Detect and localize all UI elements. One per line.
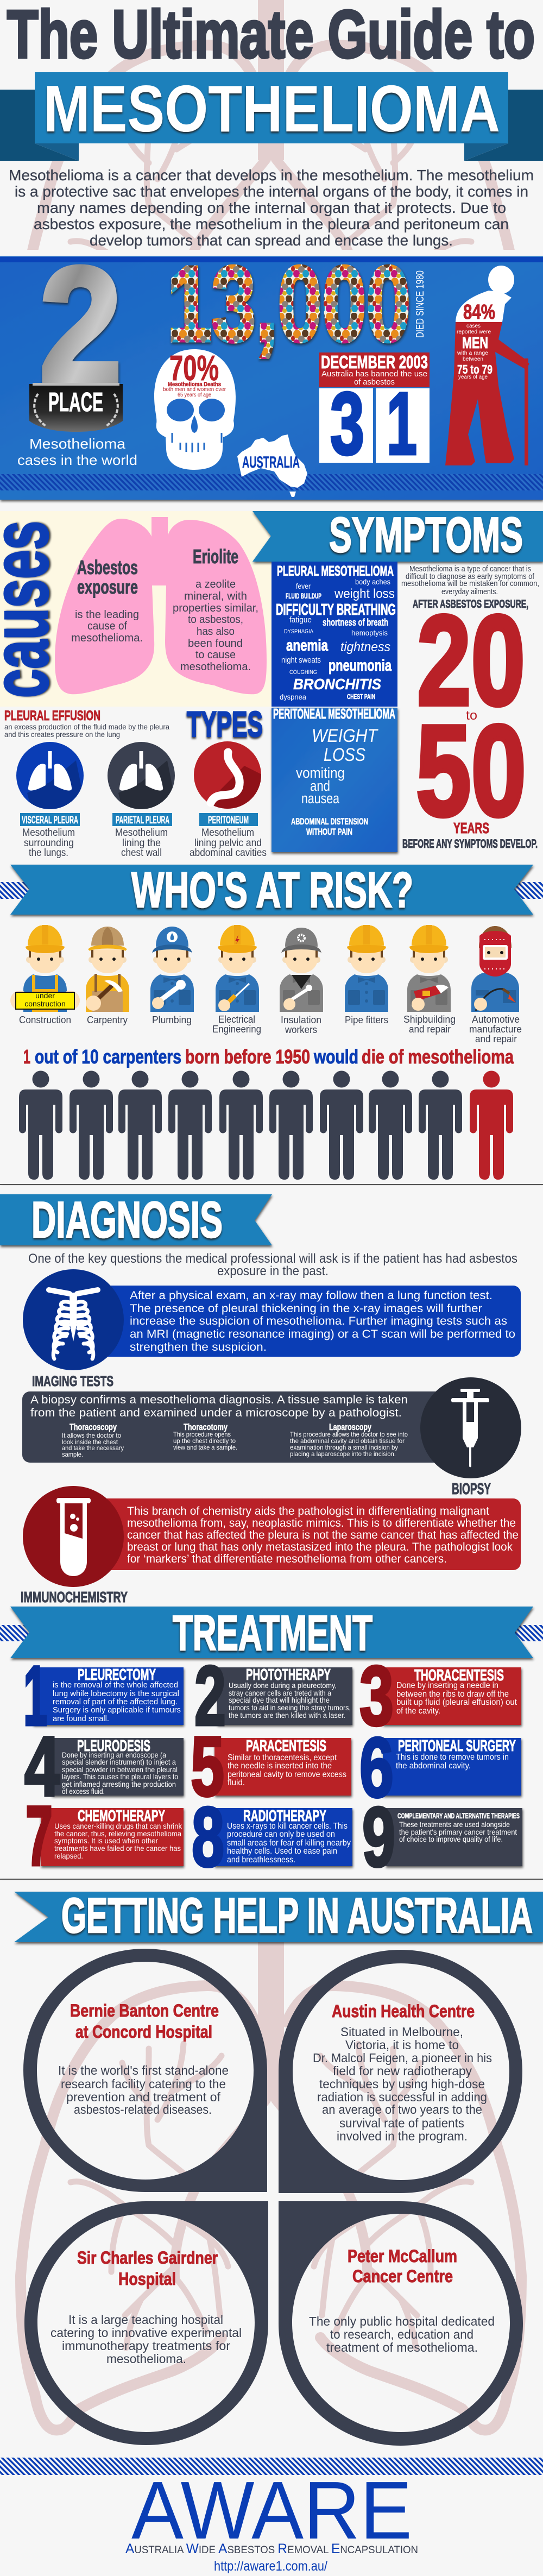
centre: Bernie Banton: at Concord Hospital <box>75 2022 212 2042</box>
heading: treatment ribbon <box>0 1606 543 1661</box>
worker: pipe fitters <box>345 925 388 1012</box>
panel: pleural mesothelioma symptoms: night sweats <box>281 656 321 665</box>
calendar: December 2003 <box>319 352 430 473</box>
type: peritoneum: lining pelvic and <box>194 837 262 849</box>
calendar: December 2003: DECEMBER 2003 <box>321 352 428 372</box>
treatment 8: radiotherapy: healthy cells. Used to ease pain <box>227 1847 337 1856</box>
treatment 7: chemotherapy <box>26 1789 184 1884</box>
worker: carpentry <box>86 927 129 1012</box>
type: parietal pleura: chest wall <box>121 847 162 859</box>
icon: test tube <box>56 1498 91 1576</box>
panel: imaging tests: an MRI (magnetic resonance imaging) or a CT scan will be performed to <box>130 1328 515 1340</box>
centre: Sir Charles Gairdner: Hospital <box>118 2269 176 2289</box>
intro text: develop tumors that can spread and encase the lungs. <box>90 232 453 249</box>
headline: 1 out of 10 carpenters: out of 10 carpenters <box>35 1045 181 1068</box>
panel: pleural mesothelioma symptoms: dyspnea <box>280 692 306 701</box>
centre: Bernie Banton: Bernie Banton Centre <box>70 2001 219 2020</box>
centre: Austin Health: field for new radiotherapy <box>333 2064 472 2078</box>
logo: AWARE: http://aware1.com.au/ <box>214 2559 327 2574</box>
text: laparoscopy: examination through a small incision by <box>290 1444 398 1451</box>
worker labels: Plumbing <box>152 1015 192 1025</box>
treatment 9: complementary therapies: These treatments are used alongside <box>399 1820 510 1829</box>
text: eriolite: to cause <box>195 649 236 661</box>
panel: immunochemistry <box>21 1486 521 1605</box>
worker labels: Automotive <box>472 1014 520 1025</box>
treatment 8: radiotherapy: RADIOTHERAPY <box>243 1807 326 1825</box>
treatment 2: phototherapy: stray cancer cells are treted with a <box>229 1689 331 1697</box>
text: laparoscopy: placing a laparoscope into the incision. <box>290 1450 396 1458</box>
illustration: lungs <box>55 517 267 694</box>
text: diagnosis intro <box>28 1251 517 1278</box>
type: parietal pleura: PARIETAL PLEURA <box>116 815 169 826</box>
panel: biopsy <box>22 1377 521 1498</box>
treatment 6: peritoneal surgery: 6 <box>359 1721 394 1815</box>
panel: immunochemistry: mesothelioma from, say, neoplastic mimics. This is to differentiate whether the <box>127 1517 516 1529</box>
panel: peritoneal mesothelioma symptoms: WITHOUT PAIN <box>306 827 352 837</box>
treatment 8: radiotherapy: small areas for fear of killing nearby <box>227 1838 351 1848</box>
text: latency 20 to 50 years <box>401 564 539 851</box>
centre: Bernie Banton <box>23 1949 267 2192</box>
text: asbestos exposure: exposure <box>77 576 138 598</box>
treatment 3: thoracentesis: built up fluid (pleural effusion) out <box>396 1698 517 1707</box>
text: pleural effusion: an excess production of the fluid made by the pleura <box>4 722 169 731</box>
panel: immunochemistry: cancer that has affected the pleura is not the same cancer that has affected the <box>127 1529 519 1541</box>
worker: electrical engineering <box>216 925 259 1012</box>
panel: biopsy: BIOPSY <box>452 1481 491 1498</box>
panel: immunochemistry: for ‘markers’ that differentiate mesothelioma from other cancers. <box>127 1553 447 1565</box>
worker labels <box>19 1014 522 1044</box>
treatment 9: complementary therapies <box>362 1790 522 1885</box>
treatment 3: thoracentesis: 3 <box>359 1649 394 1743</box>
text: thoracotomy: Thoracotomy <box>184 1422 228 1432</box>
centre: Sir Charles Gairdner: mesothelioma. <box>106 2352 186 2366</box>
headline: 1 out of 10 carpenters <box>23 1045 514 1068</box>
heading: diagnosis ribbon: DIAGNOSIS <box>31 1191 223 1248</box>
centre: Austin Health: involved in the program. <box>337 2129 468 2143</box>
worker labels: Carpentry <box>87 1015 128 1025</box>
treatment 6: peritoneal surgery <box>359 1721 521 1815</box>
figure: elderly man 84%: with a range <box>457 350 488 356</box>
treatment 4: pleurodesis: special powder in between the pleural <box>62 1765 178 1774</box>
panel: causes <box>0 511 272 707</box>
panel: imaging tests: The presence of pleural thickening in the x-ray images will further <box>130 1302 482 1315</box>
treatment 2: phototherapy: special dye that will highlight the <box>229 1696 330 1704</box>
treatment 5: paracentesis: fluid. <box>228 1778 245 1787</box>
treatment 3: thoracentesis <box>359 1649 521 1743</box>
panel: imaging tests: After a physical exam, an x-ray may follow then a lung function test. <box>130 1289 493 1302</box>
panel: pleural mesothelioma symptoms: hemoptysis <box>351 628 388 637</box>
treatment 1: pleurectomy: PLEURECTOMY <box>78 1666 156 1684</box>
panel: pleural mesothelioma symptoms: anemia <box>286 637 328 654</box>
centre: Peter McCallum: Cancer Centre <box>352 2266 453 2286</box>
treatment 3: thoracentesis: of the cavity. <box>396 1706 440 1716</box>
stat: 2nd place <box>17 232 137 468</box>
treatment 9: complementary therapies: 9 <box>362 1790 395 1885</box>
panel: pleural mesothelioma symptoms: fatigue <box>289 615 312 625</box>
treatment 1: pleurectomy: are found small. <box>53 1714 109 1723</box>
type: visceral pleura: VISCERAL PLEURA <box>22 815 78 826</box>
map: Australia: AUSTRALIA <box>242 454 300 471</box>
text: thoracoscopy: Thoracoscopy <box>70 1422 117 1432</box>
intro text: Mesothelioma is a cancer that develops in the mesothelium. The mesothelium <box>9 167 534 184</box>
text: laparoscopy <box>290 1422 408 1458</box>
centre: Bernie Banton: asbestos-related diseases. <box>74 2102 212 2117</box>
panel: peritoneal mesothelioma symptoms: PERITONEAL MESOTHELIOMA <box>273 706 395 722</box>
logo: AWARE: AWARE <box>131 2464 412 2556</box>
worker: insulation <box>280 928 323 1012</box>
text: pleural effusion: and this creates pressure on the lung <box>4 730 120 739</box>
worker labels: Electrical <box>218 1014 255 1025</box>
treatment 5: paracentesis <box>191 1720 351 1814</box>
worker labels: workers <box>285 1024 317 1035</box>
panel: imaging tests: IMAGING TESTS <box>32 1373 113 1389</box>
logo: AWARE: AUSTRALIA WIDE ASBESTOS REMOVAL ENCAPSULATION <box>125 2541 418 2556</box>
treatment 4: pleurodesis: special slender instrument) to inject a <box>62 1758 176 1766</box>
map: Australia <box>237 434 307 497</box>
worker labels: and repair <box>475 1034 517 1044</box>
worker labels: Pipe fitters <box>345 1015 388 1025</box>
centre: Austin Health: Dr. Malcol Feigen, a pioneer in his <box>313 2051 492 2065</box>
figure: elderly man 84%: 75 to 79 <box>457 362 493 376</box>
intro text: is a protective sac that envelopes the internal organs of the body, it comes in <box>15 183 528 200</box>
treatment 5: paracentesis: 5 <box>191 1720 224 1814</box>
panel: pleural mesothelioma symptoms: FLUID BUILDUP <box>286 591 321 600</box>
worker: construction: under <box>35 991 55 1000</box>
text: pleural effusion <box>4 708 169 739</box>
stat: skull 70% <box>154 348 236 470</box>
centre: Sir Charles Gairdner: Sir Charles Gairdner <box>77 2248 218 2268</box>
text: diagnosis intro: exposure in the past. <box>217 1264 329 1278</box>
icon: ribcage <box>49 1290 98 1359</box>
centre: Bernie Banton: It is the world's first stand-alone <box>58 2063 229 2077</box>
type: peritoneum: Mesothelium <box>201 827 254 839</box>
panel: pleural mesothelioma symptoms <box>272 562 397 707</box>
worker labels: Construction <box>19 1015 71 1025</box>
treatment 5: paracentesis: the needle is inserted into the <box>228 1761 332 1771</box>
treatment 5: paracentesis: Similar to thoracentesis, except <box>228 1753 337 1762</box>
treatment 4: pleurodesis: 4 <box>24 1720 60 1814</box>
panel: biopsy: from the patient and examined under a microscope by a pathologist. <box>30 1407 402 1419</box>
treatment 9: complementary therapies: the patient's primary cancer treatment <box>399 1828 517 1836</box>
treatment 7: chemotherapy: treatments have failed or the cancer has <box>54 1844 181 1853</box>
calendar: December 2003: 3 <box>330 374 364 473</box>
panel: immunochemistry: This branch of chemistry aids the pathologist in differentiating malignant <box>127 1505 489 1517</box>
figure: elderly man 84% <box>445 266 529 465</box>
centre: Austin Health: Victoria, it is home to <box>345 2038 459 2052</box>
panel: peritoneal mesothelioma symptoms: vomiting <box>296 765 345 781</box>
text: thoracoscopy: It allows the doctor to <box>62 1432 121 1439</box>
type: peritoneum <box>190 741 267 859</box>
text: asbestos exposure: is the leading <box>75 609 139 621</box>
worker: construction: construction <box>24 999 66 1008</box>
panel: biopsy: A biopsy confirms a mesothelioma diagnosis. A tissue sample is taken <box>30 1394 408 1406</box>
worker labels: and repair <box>409 1024 451 1035</box>
treatment 1: pleurectomy: lung while lobectomy is the surgical <box>53 1689 179 1698</box>
panel: immunochemistry: IMMUNOCHEMISTRY <box>21 1589 128 1605</box>
centre: Peter McCallum: The only public hospital dedicated <box>309 2314 495 2328</box>
type: parietal pleura: lining the <box>122 837 161 849</box>
text: eriolite: Eriolite <box>193 545 238 568</box>
worker: construction <box>10 925 80 1012</box>
headline: 1 out of 10 carpenters: 1 <box>23 1045 30 1068</box>
text: latency 20 to 50 years: to <box>466 708 477 723</box>
treatment 1: pleurectomy: Surgery is only applicable if tumours <box>53 1705 181 1715</box>
treatment 8: radiotherapy <box>192 1790 352 1885</box>
text: eriolite: to asbestos, <box>188 614 243 626</box>
panel: pleural mesothelioma symptoms: pneumonia <box>329 657 392 675</box>
heading: types: TYPES <box>187 704 263 744</box>
stat: 2nd place: PLACE <box>48 388 103 417</box>
stat: skull 70%: Mesothelioma Deaths <box>168 381 221 388</box>
treatment 7: chemotherapy: relapsed. <box>54 1851 83 1860</box>
treatment 5: paracentesis: peritoneal cavity to remove excess <box>228 1770 346 1779</box>
type: parietal pleura: Mesothelium <box>115 827 168 839</box>
figure: elderly man 84%: between <box>463 356 483 362</box>
treatment 6: peritoneal surgery: This is done to remove tumors in <box>396 1753 509 1762</box>
centre: Peter McCallum <box>279 2201 523 2446</box>
centre: Sir Charles Gairdner: catering to innovative experimental <box>50 2326 242 2340</box>
text: eriolite: mineral, with <box>184 590 247 602</box>
type: visceral pleura <box>16 742 87 859</box>
text: eriolite: properties similar, <box>173 602 258 614</box>
text: eriolite: a zeolite <box>195 578 236 590</box>
text: asbestos exposure: Asbestos <box>77 556 138 578</box>
worker labels: manufacture <box>469 1024 522 1035</box>
text: asbestos exposure: cause of <box>87 620 127 632</box>
panel: pleural mesothelioma symptoms: CHEST PAIN <box>347 692 375 701</box>
centre: Peter McCallum: to research, education and <box>330 2327 473 2341</box>
panel: peritoneal mesothelioma symptoms: ABDOMINAL DISTENSION <box>291 816 368 827</box>
icon: syringe <box>451 1389 489 1467</box>
text: thoracoscopy: look inside the chest <box>62 1438 118 1446</box>
type: visceral pleura: Mesothelium <box>22 827 75 839</box>
figure: elderly man 84%: years of age <box>458 374 488 380</box>
calendar: December 2003: 1 <box>387 374 417 473</box>
treatment 8: radiotherapy: procedure can only be used on <box>227 1830 335 1839</box>
lung watermark, bottom <box>21 1941 521 2430</box>
panel: peritoneal mesothelioma symptoms: and <box>310 778 330 794</box>
panel: pleural mesothelioma symptoms: DIFFICULTY BREATHING <box>276 601 396 619</box>
panel: imaging tests: increase the suspicion of mesothelioma. Further imaging tests such as <box>130 1315 507 1327</box>
treatment 4: pleurodesis: of excess fluid. <box>62 1787 105 1796</box>
panel: statistics <box>0 232 543 500</box>
type: peritoneum: PERITONEUM <box>208 815 249 826</box>
text: thoracotomy: This procedure opens <box>173 1431 231 1438</box>
text: thoracoscopy: sample. <box>62 1451 83 1458</box>
figure: elderly man 84%: 84% <box>463 301 495 324</box>
treatment 7: chemotherapy: CHEMOTHERAPY <box>78 1807 165 1825</box>
figure: elderly man 84%: cases <box>466 323 481 329</box>
centre: Sir Charles Gairdner <box>24 2201 268 2445</box>
panel: pleural mesothelioma symptoms: shortness of breath <box>323 617 388 628</box>
treatment 1: pleurectomy: 1 <box>23 1649 47 1743</box>
lung watermark, top <box>27 0 515 250</box>
panel: pleural mesothelioma symptoms: tightness <box>340 640 390 654</box>
text: asbestos exposure <box>71 556 143 644</box>
treatment 7: chemotherapy: symptoms. It is used when other <box>54 1836 158 1845</box>
treatment 4: pleurodesis: PLEURODESIS <box>77 1737 150 1755</box>
panel: peritoneal mesothelioma symptoms: LOSS <box>324 745 365 765</box>
treatment 5: paracentesis: PARACENTESIS <box>246 1737 326 1755</box>
figure: elderly man 84%: reported were <box>457 329 491 335</box>
centre: Peter McCallum: Peter McCallum <box>348 2246 457 2266</box>
treatment 9: complementary therapies: of choice to improve quality of life. <box>399 1835 503 1843</box>
centre: Austin Health: an average of two years to the <box>322 2102 482 2117</box>
stat: skull 70%: 65 years of age <box>178 392 211 398</box>
text: latency 20 to 50 years: YEARS <box>453 820 489 836</box>
text: eriolite: has also <box>197 626 235 638</box>
treatment 2: phototherapy <box>194 1649 352 1743</box>
centre: Sir Charles Gairdner: immunotherapy treatments for <box>62 2339 230 2353</box>
worker: plumbing <box>150 927 194 1012</box>
panel: imaging tests: strengthen the suspicion. <box>130 1341 267 1353</box>
type: parietal pleura <box>108 742 178 859</box>
panel: pleural mesothelioma symptoms: weight loss <box>334 587 395 601</box>
treatment 4: pleurodesis <box>24 1720 184 1814</box>
treatment 7: chemotherapy: the cancer, thus, relieving mesothelioma <box>54 1829 181 1838</box>
stat: skull 70%: 70% <box>169 348 219 388</box>
worker labels: Shipbuilding <box>403 1014 456 1025</box>
treatment 7: chemotherapy: Uses cancer-killing drugs that can shrink <box>54 1822 182 1830</box>
text: eriolite: been found <box>188 638 243 650</box>
stat: 2nd place: Mesothelioma <box>29 436 126 452</box>
centre: Austin Health: survival rate of patients <box>339 2116 464 2130</box>
treatment 1: pleurectomy <box>23 1649 184 1743</box>
text: thoracotomy: view and take a sample. <box>173 1444 237 1451</box>
stat: 2nd place: 2 <box>39 232 122 418</box>
treatment 2: phototherapy: PHOTOTHERAPY <box>246 1666 331 1684</box>
panel: pleural mesothelioma symptoms: BRONCHITIS <box>293 676 381 692</box>
intro text: many names depending on the internal organ that it protects. Due to <box>37 199 506 216</box>
treatment 8: radiotherapy: and breathlessness. <box>227 1855 295 1865</box>
panel: pleural mesothelioma symptoms: COUGHING <box>289 669 317 676</box>
pictogram: ten people <box>19 1071 513 1180</box>
stat: 2nd place: cases in the world <box>17 452 137 468</box>
panel: peritoneal mesothelioma symptoms: WEIGHT <box>312 726 378 746</box>
stat: skull 70%: both men and women over <box>163 387 226 393</box>
centre: Austin Health: radiation is successful in adding <box>317 2090 487 2104</box>
text: eriolite: mesothelioma. <box>180 661 251 673</box>
figure: elderly man 84%: MEN <box>462 334 488 352</box>
treatment 8: radiotherapy: 8 <box>192 1790 224 1885</box>
text: laparoscopy: the abdominal cavity and obtain tissue for <box>290 1437 405 1445</box>
worker: automotive <box>471 926 519 1012</box>
intro text <box>9 167 534 249</box>
treatment 2: phototherapy: Usually done during a pleurectomy, <box>229 1681 337 1690</box>
text: diagnosis intro: One of the key questions the medical professional will ask is if the patient has had asbestos <box>28 1251 517 1266</box>
stat: 13,000 died: 13,000 <box>167 244 411 363</box>
panel: pleural mesothelioma symptoms: fever <box>296 582 311 590</box>
treatment 6: peritoneal surgery: the abdominal cavity. <box>396 1761 471 1771</box>
treatment 2: phototherapy: the tumors are then killed with a laser. <box>229 1711 345 1720</box>
treatment 3: thoracentesis: Done by inserting a needle in <box>396 1681 498 1690</box>
centre: Austin Health: Situated in Melbourne, <box>340 2025 463 2039</box>
centre: Austin Health: Austin Health Centre <box>332 2001 475 2021</box>
centre: Sir Charles Gairdner: It is a large teaching hospital <box>68 2313 223 2327</box>
panel: pleural mesothelioma symptoms: PLEURAL MESOTHELIOMA <box>277 563 394 579</box>
panel: imaging tests <box>23 1269 521 1389</box>
stat: 13,000 died: DIED SINCE 1980 <box>414 270 426 338</box>
text: asbestos exposure: mesothelioma. <box>71 632 143 644</box>
treatment 4: pleurodesis: layers. This causes the pleural layers to <box>62 1772 178 1781</box>
centre: Bernie Banton: research facility catering to the <box>61 2077 226 2091</box>
centre: Bernie Banton: prevention and treatment of <box>66 2090 221 2104</box>
text: thoracoscopy <box>62 1422 124 1458</box>
intro text: asbestos exposure, the mesothelium in the pleura and peritoneum can <box>34 216 509 232</box>
type: visceral pleura: the lungs. <box>29 847 68 859</box>
treatment 4: pleurodesis: Done by inserting an endoscope (a <box>62 1750 166 1759</box>
centre: Peter McCallum: treatment of mesothelioma. <box>326 2340 478 2354</box>
text: thoracotomy <box>173 1422 237 1451</box>
treatment 8: radiotherapy: Uses x-rays to kill cancer cells. This <box>227 1822 348 1831</box>
worker labels: Engineering <box>212 1024 261 1035</box>
treatment 3: thoracentesis: between the ribs to draw off the <box>396 1690 509 1699</box>
text: laparoscopy: Laparoscopy <box>329 1422 371 1432</box>
treatment 2: phototherapy: tumors to aid in seeing the stray tumors, <box>229 1703 351 1712</box>
panel: immunochemistry: breast or lung that has only metastasized into the pleura. The pathologist look <box>127 1541 513 1553</box>
type: visceral pleura: surrounding <box>24 837 74 849</box>
calendar: December 2003: Australia has banned the use <box>321 369 427 379</box>
type: peritoneum: abdominal cavities <box>190 847 267 859</box>
panel: peritoneal mesothelioma symptoms: nausea <box>301 790 340 807</box>
centre: Austin Health: techniques by using high-dose <box>319 2077 485 2091</box>
treatment 7: chemotherapy: 7 <box>26 1789 53 1884</box>
treatment 2: phototherapy: 2 <box>194 1649 226 1743</box>
text: eriolite <box>173 545 258 673</box>
centre: Austin Health <box>279 1950 522 2193</box>
panel: peritoneal mesothelioma symptoms <box>272 706 397 852</box>
heading: treatment ribbon: TREATMENT <box>173 1606 372 1661</box>
headline: 1 out of 10 carpenters: would <box>313 1045 358 1068</box>
calendar: December 2003: of asbestos <box>354 377 395 387</box>
treatment 1: pleurectomy: is the removal of the whole affected <box>53 1680 178 1690</box>
treatment 1: pleurectomy: removal of part of the affected lung. <box>53 1697 178 1706</box>
worker labels: Insulation <box>281 1015 321 1025</box>
treatment 4: pleurodesis: get inflamed arresting the production <box>62 1780 176 1788</box>
text: pleural effusion: PLEURAL EFFUSION <box>4 708 100 723</box>
worker: shipbuilding <box>407 925 451 1012</box>
heading: who's at risk ribbon: WHO'S AT RISK? <box>131 862 413 918</box>
panel: pleural mesothelioma symptoms: body aches <box>355 577 390 586</box>
text: laparoscopy: This procedure allows the doctor to see into <box>290 1431 408 1438</box>
panel: pleural mesothelioma symptoms: DYSPHAGIA <box>284 628 314 635</box>
text: thoracotomy: up the chest directly to <box>173 1437 236 1445</box>
text: thoracoscopy: and take the necessary <box>62 1444 124 1452</box>
headline: 1 out of 10 carpenters: born before 1950 <box>185 1045 310 1068</box>
text: latency 20 to 50 years: everyday ailments. <box>441 587 498 596</box>
